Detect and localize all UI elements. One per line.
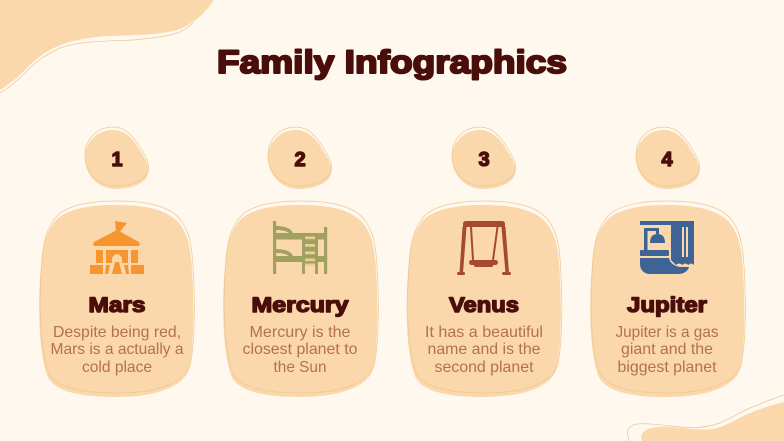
card Mars [39, 201, 194, 397]
number badge 3: 3 [478, 149, 490, 171]
description Mercury: Mercury is the [250, 324, 351, 341]
description Venus: name and is the [428, 341, 541, 358]
description Mars: Mars is a actually a [50, 341, 184, 358]
description Venus: second planet [434, 359, 534, 376]
number badge 1: 1 [111, 149, 123, 171]
column 1: Mars [39, 127, 194, 397]
number badge 4 [636, 127, 700, 189]
description Mercury: closest planet to [242, 341, 358, 358]
number badge 2 [268, 127, 332, 189]
description Jupiter: Jupiter is a gas [616, 324, 718, 341]
description Jupiter [616, 324, 718, 376]
description Mars [50, 324, 184, 376]
number badge 2: 2 [294, 149, 306, 171]
description Venus: It has a beautiful [425, 324, 543, 341]
column 3: Venus [407, 127, 562, 397]
number badge 1 [85, 127, 149, 189]
column 2: Mercury [223, 127, 378, 397]
number badge 3 [452, 127, 516, 189]
card Jupiter [590, 201, 745, 397]
icon: bathtub with shower [640, 221, 694, 274]
heading Venus: Venus [449, 294, 519, 317]
heading Mercury: Mercury [252, 294, 349, 317]
icon: swing [457, 221, 511, 275]
title: Family Infographics [217, 44, 567, 80]
description Jupiter: biggest planet [618, 359, 717, 376]
description Venus [425, 324, 543, 376]
heading Mars: Mars [88, 294, 146, 317]
description Jupiter: giant and the [621, 341, 713, 358]
heading Jupiter: Jupiter [627, 294, 707, 317]
icon: bunk bed [273, 221, 327, 274]
description Mars: cold place [82, 359, 152, 376]
card Venus [407, 201, 562, 397]
decorative blob: bottom right [627, 395, 784, 441]
card Mercury [223, 201, 378, 397]
description Mars: Despite being red, [53, 324, 181, 341]
column 4: Jupiter [590, 127, 745, 397]
description Mercury: the Sun [274, 359, 326, 376]
decorative blob: top left [0, 0, 214, 93]
description Mercury [242, 324, 358, 376]
number badge 4: 4 [661, 149, 673, 171]
icon: building [90, 221, 144, 274]
